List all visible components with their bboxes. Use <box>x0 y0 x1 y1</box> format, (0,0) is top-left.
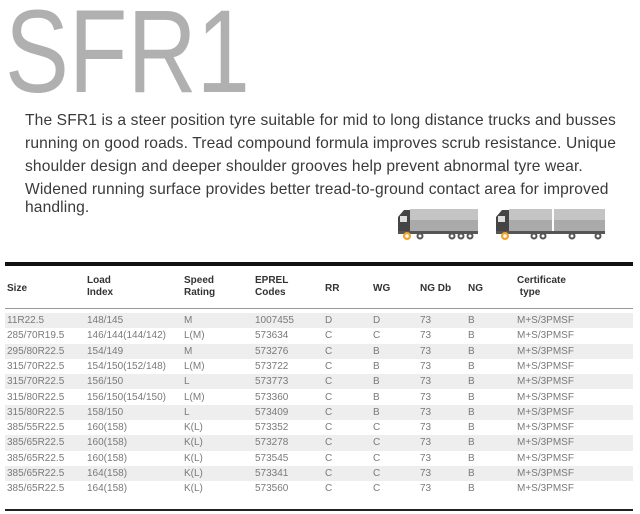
data table: K(L) <box>184 437 203 448</box>
data table: 573409 <box>255 407 288 418</box>
data table: 385/65R22.5 <box>7 483 64 494</box>
data table: 573545 <box>255 453 288 464</box>
data table: B <box>468 453 475 464</box>
data table: 164(158) <box>87 483 127 494</box>
data table: 154/149 <box>87 346 123 357</box>
data table: 73 <box>420 468 431 479</box>
data table: 73 <box>420 437 431 448</box>
table header: Codes <box>255 287 286 298</box>
data table: 573276 <box>255 346 288 357</box>
description paragraph: Widened running surface provides better tread-to-ground contact area for improved <box>25 181 609 198</box>
data table: 73 <box>420 483 431 494</box>
data table: 73 <box>420 361 431 372</box>
data table: M+S/3PMSF <box>517 483 574 494</box>
data table: C <box>325 361 332 372</box>
data table: C <box>325 483 332 494</box>
description paragraph <box>25 112 616 216</box>
data table: C <box>373 453 380 464</box>
data table: M+S/3PMSF <box>517 437 574 448</box>
data table: 385/65R22.5 <box>7 453 64 464</box>
data table: B <box>468 407 475 418</box>
data table: 73 <box>420 376 431 387</box>
data table: C <box>325 437 332 448</box>
data table: 573773 <box>255 376 288 387</box>
data table: 73 <box>420 346 431 357</box>
data table: 160(158) <box>87 453 127 464</box>
data table: 146/144(144/142) <box>87 330 166 341</box>
table header <box>7 275 566 298</box>
data table: C <box>325 330 332 341</box>
data table: 573722 <box>255 361 288 372</box>
table header: NG <box>468 283 483 294</box>
table header: NG Db <box>420 283 451 294</box>
data table: M+S/3PMSF <box>517 468 574 479</box>
data table: C <box>325 422 332 433</box>
table header: Size <box>7 283 27 294</box>
data table: C <box>373 483 380 494</box>
data table: 73 <box>420 407 431 418</box>
data table: B <box>468 361 475 372</box>
data table: M+S/3PMSF <box>517 361 574 372</box>
data table: B <box>468 330 475 341</box>
data table: B <box>373 392 380 402</box>
data table: M+S/3PMSF <box>517 376 574 387</box>
data table: B <box>468 392 475 402</box>
data table: 160(158) <box>87 422 127 433</box>
data table: D <box>325 315 332 326</box>
data table: 73 <box>420 392 431 402</box>
data table: 156/150(154/150) <box>87 392 166 402</box>
data table: B <box>468 376 475 387</box>
data table: 315/80R22.5 <box>7 407 64 418</box>
data table: C <box>373 422 380 433</box>
table header: Index <box>87 287 113 298</box>
data table: 385/55R22.5 <box>7 422 64 433</box>
data table: 11R22.5 <box>7 315 44 326</box>
data table: B <box>373 376 380 387</box>
table header: RR <box>325 283 339 294</box>
data table: D <box>373 315 380 326</box>
table header: Speed <box>184 275 214 286</box>
data table: B <box>468 346 475 357</box>
data table: 385/65R22.5 <box>7 468 64 479</box>
data table: K(L) <box>184 468 203 479</box>
data table: L(M) <box>184 330 205 341</box>
data table: 73 <box>420 315 431 326</box>
data table: M+S/3PMSF <box>517 407 574 418</box>
data table: M+S/3PMSF <box>517 346 574 357</box>
data table: 295/80R22.5 <box>7 346 64 357</box>
icon: truck with trailer <box>496 209 605 240</box>
data table: 315/70R22.5 <box>7 376 64 387</box>
data table: B <box>468 468 475 479</box>
data table: 573360 <box>255 392 288 402</box>
data table: 385/65R22.5 <box>7 437 64 448</box>
description paragraph: shoulder design and deeper shoulder grooves help prevent abnormal tyre wear. <box>25 158 583 175</box>
table header: type <box>520 287 540 298</box>
data table: K(L) <box>184 453 203 464</box>
data table: C <box>325 392 332 402</box>
data table: B <box>468 315 475 326</box>
data table: B <box>373 346 380 357</box>
data table: C <box>325 346 332 357</box>
data table: 158/150 <box>87 407 123 418</box>
data table: 285/70R19.5 <box>7 330 64 341</box>
data table: L(M) <box>184 361 205 372</box>
data table: 154/150(152/148) <box>87 361 166 372</box>
data table: 315/70R22.5 <box>7 361 64 372</box>
data table: 73 <box>420 453 431 464</box>
data table: L <box>184 376 190 387</box>
data table: C <box>325 468 332 479</box>
data table: M+S/3PMSF <box>517 453 574 464</box>
table header: EPREL <box>255 275 288 286</box>
data table: B <box>468 483 475 494</box>
data table: 73 <box>420 422 431 433</box>
data table: B <box>373 407 380 418</box>
data table: M <box>184 315 192 326</box>
data table: 160(158) <box>87 437 127 448</box>
description paragraph: handling. <box>25 199 89 216</box>
data table: 148/145 <box>87 315 123 326</box>
data table: 164(158) <box>87 468 127 479</box>
table header: Load <box>87 275 111 286</box>
data table: 315/80R22.5 <box>7 392 64 402</box>
data table: 573278 <box>255 437 288 448</box>
data table: K(L) <box>184 422 203 433</box>
data table: K(L) <box>184 483 203 494</box>
icon: truck <box>398 209 478 240</box>
table header: Certificate <box>517 275 566 286</box>
data table: C <box>373 437 380 448</box>
data table: B <box>468 422 475 433</box>
description paragraph: running on good roads. Tread compound formula improves scrub resistance. Unique <box>25 135 616 152</box>
data table: C <box>325 407 332 418</box>
data table: M <box>184 346 192 357</box>
data table: M+S/3PMSF <box>517 392 574 402</box>
data table: 573352 <box>255 422 288 433</box>
data table: L <box>184 407 190 418</box>
data table: C <box>373 330 380 341</box>
data table: M+S/3PMSF <box>517 330 574 341</box>
data table: C <box>325 453 332 464</box>
data table: 156/150 <box>87 376 123 387</box>
data table: M+S/3PMSF <box>517 315 574 326</box>
data table <box>5 313 633 494</box>
data table: 573341 <box>255 468 288 479</box>
description paragraph: The SFR1 is a steer position tyre suitable for mid to long distance trucks and busses <box>25 112 616 129</box>
table header: WG <box>373 283 390 294</box>
data table: B <box>468 437 475 448</box>
data table: L(M) <box>184 392 205 402</box>
data table: 1007455 <box>255 315 294 326</box>
data table: C <box>373 468 380 479</box>
data table: 573560 <box>255 483 288 494</box>
data table: 573634 <box>255 330 288 341</box>
data table: 73 <box>420 330 431 341</box>
table header: Rating <box>184 287 215 298</box>
data table: C <box>325 376 332 387</box>
data table: B <box>373 361 380 372</box>
data table: M+S/3PMSF <box>517 422 574 433</box>
